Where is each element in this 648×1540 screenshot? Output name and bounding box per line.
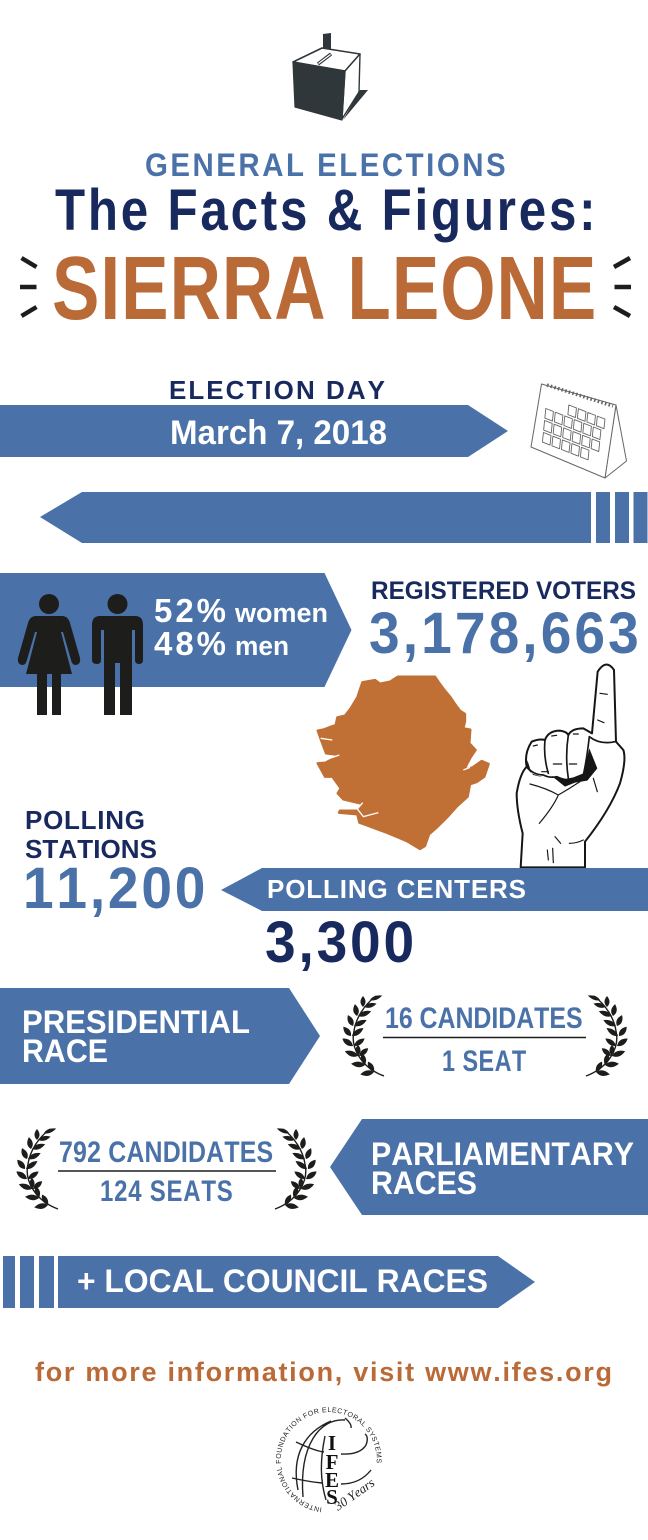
icon: laurel right, parliamentary xyxy=(275,1127,318,1210)
text: parliamentary seats: 124 SEATS xyxy=(100,1173,233,1208)
icon: desk calendar xyxy=(531,384,626,478)
text: more information: for more information, visit www.ifes.org xyxy=(35,1357,612,1387)
text: men share xyxy=(154,625,289,662)
text: presidential seats: 1 SEAT xyxy=(442,1044,527,1078)
icon: ballot box xyxy=(293,33,368,120)
text: women share: 52% xyxy=(154,592,226,629)
text: IFES letters xyxy=(325,1431,339,1509)
icon: emphasis ticks right xyxy=(614,258,631,316)
icon: woman xyxy=(18,594,80,715)
arrow: local council races xyxy=(3,1256,535,1308)
heading: registered voters: REGISTERED VOTERS xyxy=(371,577,636,605)
text: women share xyxy=(154,592,328,629)
icon: raised finger hand xyxy=(517,665,624,867)
icon: laurel left, presidential xyxy=(341,994,384,1077)
text: IFES letters: F xyxy=(326,1450,338,1474)
text: parliamentary candidates: 792 CANDIDATES xyxy=(59,1135,273,1169)
text: presidential race xyxy=(22,1004,250,1069)
title: the facts and figures: The Facts & Figures: xyxy=(55,178,596,243)
icon: laurel right, presidential xyxy=(586,994,629,1077)
arrow: gender split banner xyxy=(0,573,352,687)
text: parliamentary races: RACES xyxy=(371,1165,477,1201)
text: IFES letters: S xyxy=(326,1485,338,1509)
text: women share: women xyxy=(234,598,328,628)
text: election date: March 7, 2018 xyxy=(170,414,387,452)
text: parliamentary races: PARLIAMENTARY xyxy=(371,1136,634,1172)
icon: emphasis ticks left xyxy=(20,258,36,316)
heading: polling stations: STATIONS xyxy=(25,834,157,864)
text: parliamentary races xyxy=(371,1136,634,1201)
map: sierra leone xyxy=(318,677,489,849)
arrow: presidential race xyxy=(0,988,320,1084)
title: sierra leone: SIERRA LEONE xyxy=(52,239,596,339)
text: foundation name on arc: INTERNATIONAL FOUNDATION FOR ELECTORAL SYSTEMS xyxy=(276,1407,382,1512)
text: presidential race: PRESIDENTIAL xyxy=(22,1004,250,1040)
icon: man xyxy=(92,594,143,715)
arrow: blank left-pointing banner xyxy=(40,492,648,543)
arrow: parliamentary races xyxy=(330,1119,648,1215)
text: polling centers: POLLING CENTERS xyxy=(267,874,526,904)
arrow: election date xyxy=(0,405,508,457)
arrow: polling centers xyxy=(221,868,648,911)
heading: polling stations xyxy=(25,805,157,864)
text: IFES letters: I xyxy=(328,1431,336,1455)
figure: polling centers: 3,300 xyxy=(265,910,414,974)
text: 30 years: 30 Years xyxy=(330,1475,377,1514)
text: IFES letters: E xyxy=(325,1468,339,1492)
icon: laurel left, parliamentary xyxy=(15,1127,58,1210)
heading: election day: ELECTION DAY xyxy=(169,375,385,405)
heading: general elections: GENERAL ELECTIONS xyxy=(145,147,506,183)
figure: polling stations: 11,200 xyxy=(23,856,205,920)
logo: IFES xyxy=(276,1407,382,1514)
text: men share: 48% xyxy=(154,625,226,662)
text: presidential candidates: 16 CANDIDATES xyxy=(385,1001,583,1035)
text: local council races: + LOCAL COUNCIL RACES xyxy=(77,1263,488,1299)
heading: polling stations: POLLING xyxy=(25,805,145,835)
figure: registered voters: 3,178,663 xyxy=(369,601,639,665)
text: presidential race: RACE xyxy=(22,1033,108,1069)
text: men share: men xyxy=(235,631,289,661)
